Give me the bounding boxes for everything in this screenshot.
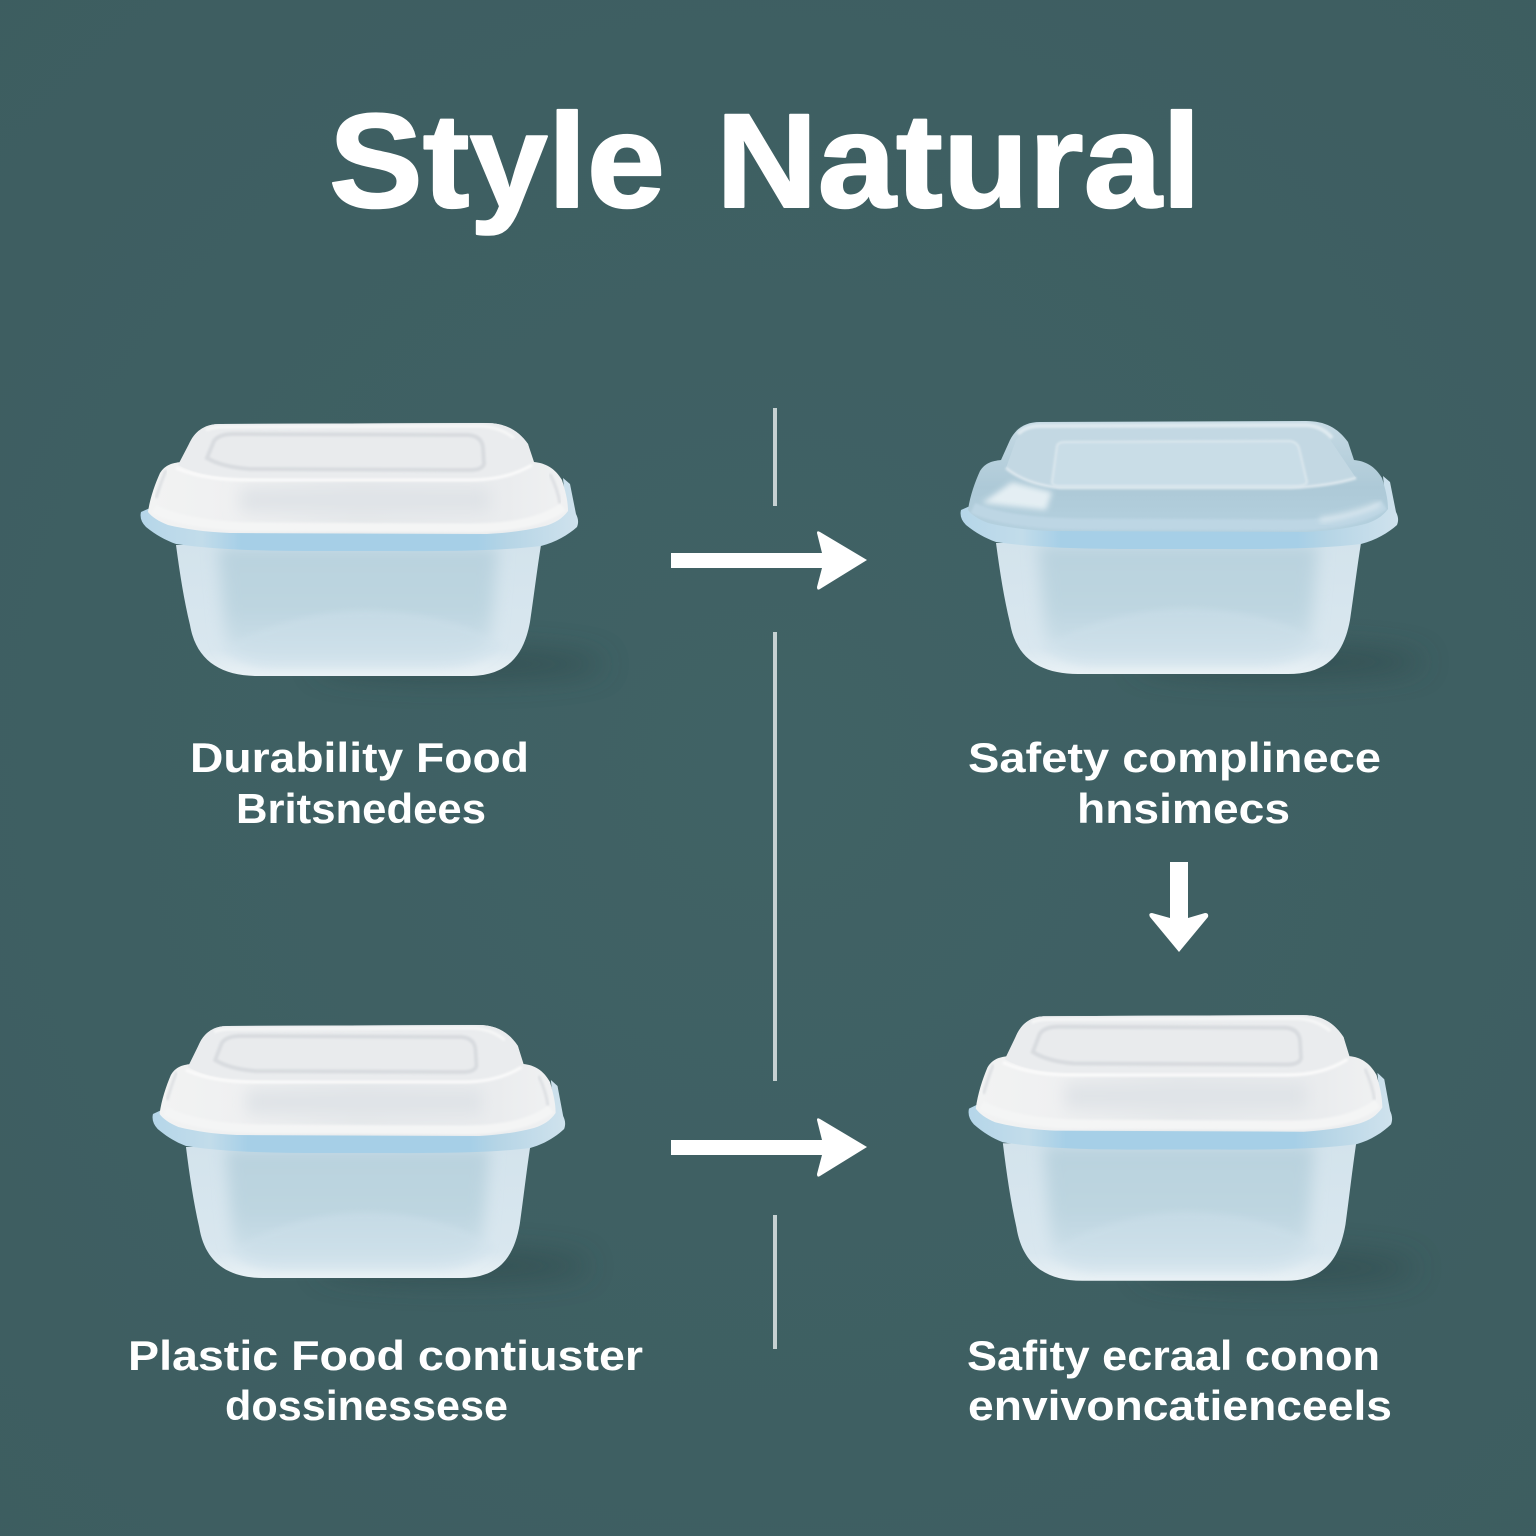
label: durability <box>190 734 529 832</box>
icon: white-lid food container <box>969 1015 1418 1284</box>
center divider: bottom segment <box>773 1215 777 1349</box>
label: safety environment <box>967 1332 1392 1429</box>
panel: top-left container <box>141 423 605 832</box>
title: Natural <box>716 87 1201 236</box>
label: safety compliance: hnsimecs <box>1077 785 1290 832</box>
label: durability: Britsnedees <box>236 785 486 832</box>
label: safety compliance: Safety complinece <box>968 734 1381 781</box>
label: durability: Durability Food <box>190 734 529 781</box>
label: safety environment: Safity ecraal conon <box>967 1332 1380 1379</box>
arrow: down <box>1149 862 1208 952</box>
icon: white-lid food container <box>153 1025 591 1281</box>
icon: white-lid food container <box>141 423 605 679</box>
center divider: top segment <box>773 408 777 506</box>
arrow: top horizontal <box>671 531 867 590</box>
label: safety compliance <box>968 734 1381 832</box>
label: safety environment: envivoncatienceels <box>968 1382 1392 1429</box>
panel: bottom-left container <box>128 1025 643 1429</box>
title: Style <box>329 87 665 236</box>
label: plastic food container: Plastic Food contiuster <box>128 1332 643 1379</box>
label: plastic food container: dossinessese <box>225 1382 508 1429</box>
center divider: middle segment <box>773 632 777 1081</box>
icon: clear-lid food container <box>961 421 1425 677</box>
label: plastic food container <box>128 1332 643 1429</box>
arrow: bottom horizontal <box>671 1118 867 1177</box>
panel: top-right container <box>961 421 1425 832</box>
panel: bottom-right container <box>967 1015 1418 1429</box>
title <box>329 87 1201 236</box>
